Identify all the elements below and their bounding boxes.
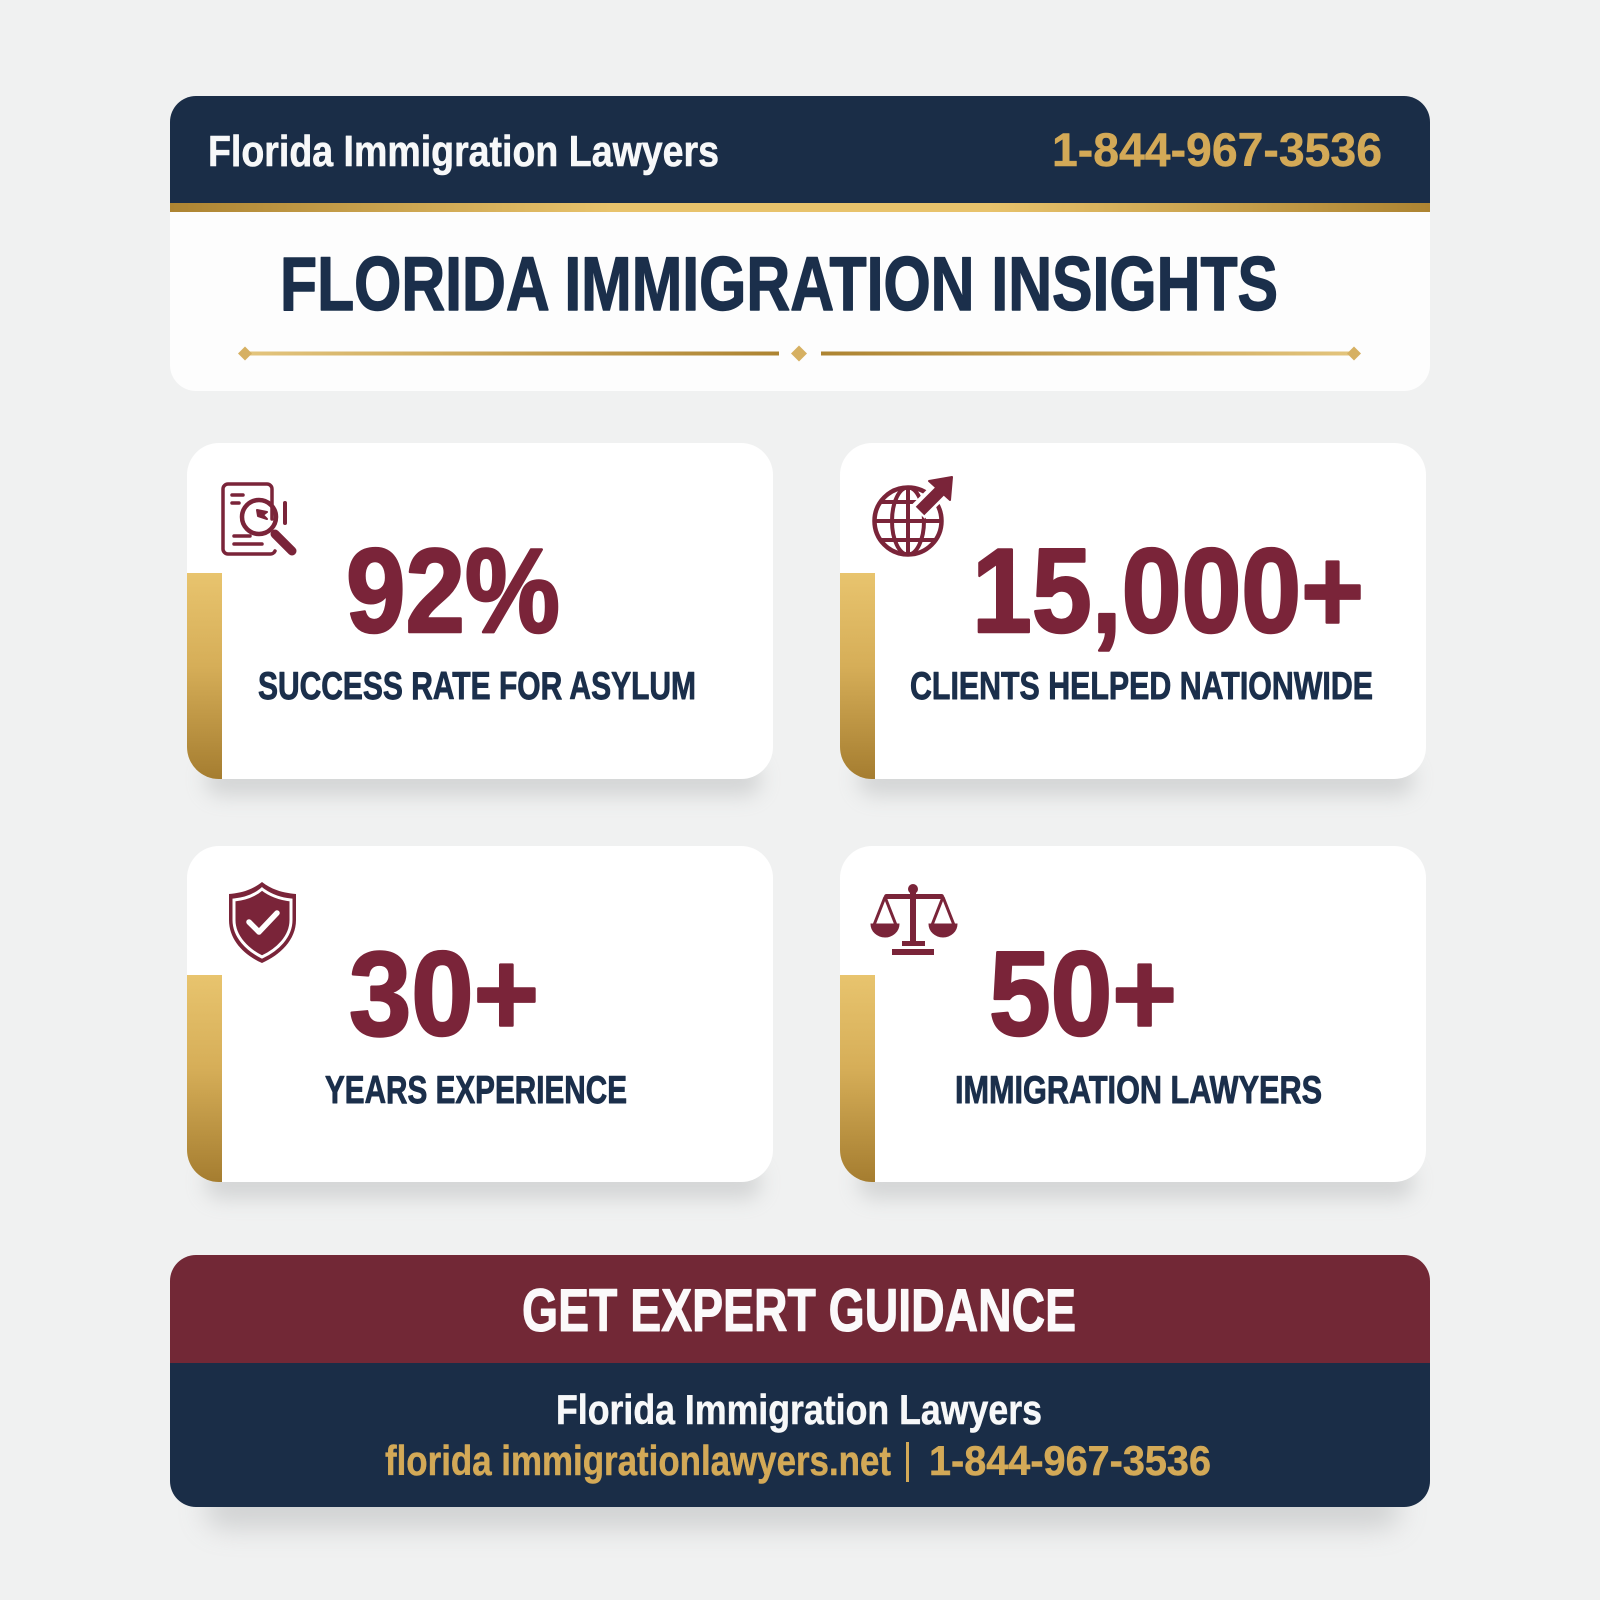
navy band [170, 1363, 1430, 1507]
maroon band [170, 1255, 1430, 1364]
separator [906, 1442, 909, 1482]
label: YEARS EXPERIENCE [325, 1069, 627, 1112]
card body [840, 443, 1426, 779]
value: 50+ [989, 927, 1177, 1061]
ornamental divider [238, 346, 1361, 362]
card shadow [205, 762, 761, 796]
card shadow [858, 1165, 1414, 1199]
label: SUCCESS RATE FOR ASYLUM [258, 665, 696, 708]
icon: scales of justice [871, 884, 957, 955]
card shadow [858, 762, 1414, 796]
gold accent bar [187, 573, 222, 779]
card body [187, 443, 773, 779]
stat card: years of experience [187, 846, 773, 1199]
card body [187, 846, 773, 1182]
value: 15,000+ [972, 524, 1364, 658]
gold accent bar [840, 573, 875, 779]
phone number: 1-844-967-3536 [929, 1437, 1211, 1484]
value: 30+ [349, 927, 539, 1061]
stat card: asylum success rate [187, 443, 773, 796]
value: 92% [346, 524, 560, 658]
label: CLIENTS HELPED NATIONWIDE [910, 665, 1373, 708]
stat card: immigration lawyers [840, 846, 1426, 1199]
header panel [170, 96, 1430, 391]
icon: globe with arrow [874, 477, 952, 555]
icon: shield with check [229, 882, 296, 963]
gold rule [170, 203, 1430, 212]
phone number: 1-844-967-3536 [1052, 123, 1382, 176]
panel shadow [205, 1488, 1400, 1528]
firm name: Florida Immigration Lawyers [556, 1386, 1042, 1433]
card shadow [205, 1165, 761, 1199]
stat card: clients helped [840, 443, 1426, 796]
website: florida immigrationlawyers.net [385, 1437, 891, 1484]
icon: document with magnifying glass [223, 484, 292, 554]
label: IMMIGRATION LAWYERS [955, 1069, 1322, 1112]
gold accent bar [187, 975, 222, 1182]
call to action heading: GET EXPERT GUIDANCE [522, 1277, 1076, 1344]
firm name: Florida Immigration Lawyers [208, 127, 719, 176]
card body [840, 846, 1426, 1182]
header white body [170, 200, 1430, 391]
header navy bar [170, 96, 1430, 204]
call to action panel [170, 1255, 1430, 1528]
main title: FLORIDA IMMIGRATION INSIGHTS [280, 242, 1278, 327]
gold accent bar [840, 975, 875, 1182]
